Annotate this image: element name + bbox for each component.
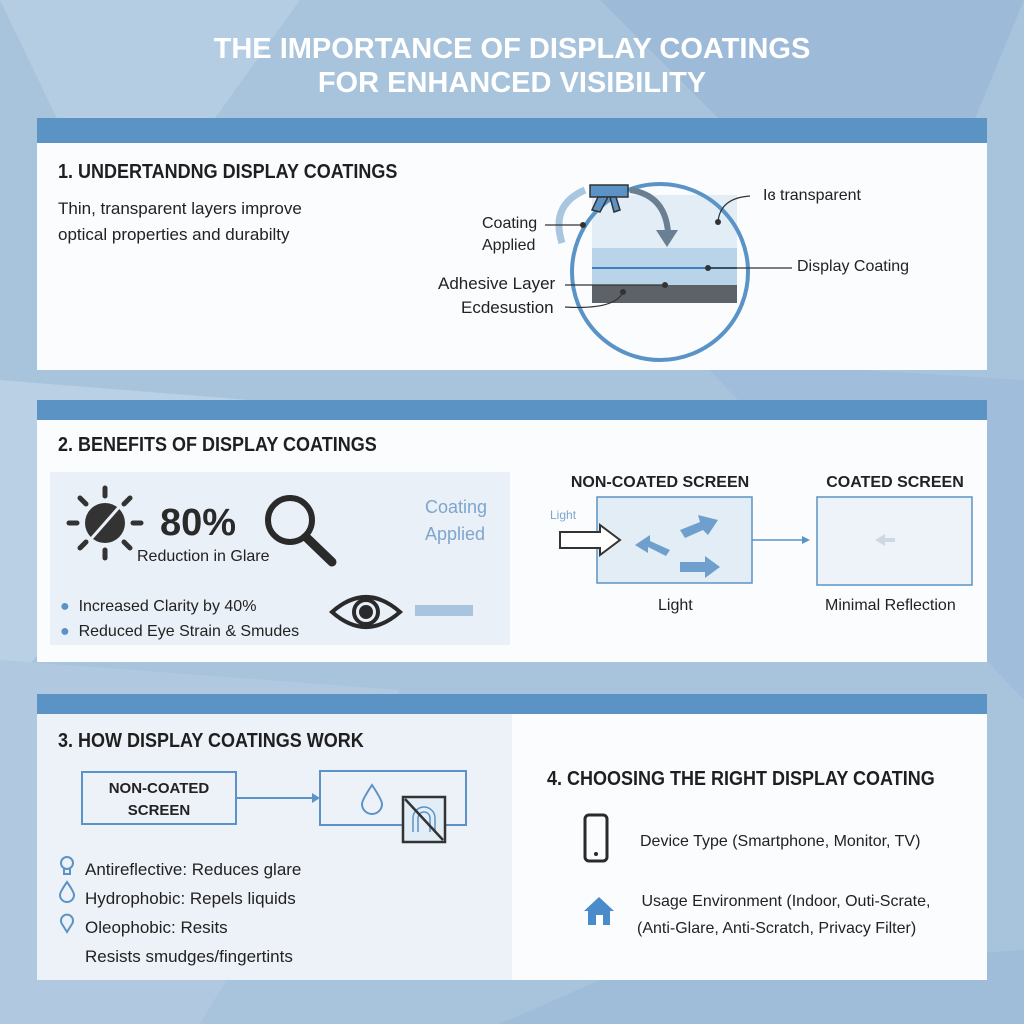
icon: magnifier <box>265 495 336 566</box>
bullets <box>60 598 299 640</box>
icon: sun <box>66 486 144 560</box>
usage environment: (Anti-Glare, Anti-Scratch, Privacy Filter) <box>637 920 916 937</box>
text 1: optical properties and durabilty <box>58 225 290 244</box>
screen comparison: NON-COATED SCREEN <box>571 474 749 491</box>
icon: eye <box>329 594 403 630</box>
icon: phone <box>584 814 608 862</box>
text 1 <box>58 199 302 244</box>
title: FOR ENHANCED VISIBILITY <box>318 67 706 99</box>
heading 4: 4. CHOOSING THE RIGHT DISPLAY COATING <box>547 768 935 790</box>
title: THE IMPORTANCE OF DISPLAY COATINGS <box>214 33 810 65</box>
stat 80%: 80% <box>160 502 236 544</box>
text 1: Thin, transparent layers improve <box>58 199 302 218</box>
screen comparison: Light <box>658 597 693 614</box>
screen comparison: COATED SCREEN <box>826 474 964 491</box>
panel 2: benefits <box>37 400 987 662</box>
bullets: ● Increased Clarity by 40% <box>60 598 256 615</box>
text: Adhesive Layer <box>438 274 555 293</box>
flow diagram: SCREEN <box>128 802 190 819</box>
list of coating types <box>59 856 301 966</box>
text: Display Coating <box>797 258 909 275</box>
flow diagram <box>81 770 467 844</box>
diagram: coating layers <box>545 182 792 362</box>
list of coating types: Antireflective: Reduces glare <box>85 860 301 879</box>
labels 1 <box>482 215 537 254</box>
usage environment: Usage Environment (Indoor, Outi-Scrate, <box>641 893 930 910</box>
screen comparison <box>550 474 973 614</box>
heading 1: 1. UNDERTANDNG DISPLAY COATINGS <box>58 161 397 183</box>
labels 1: Applied <box>482 237 535 254</box>
panel 1: understanding <box>37 118 987 370</box>
heading 2: 2. BENEFITS OF DISPLAY COATINGS <box>58 434 377 456</box>
usage environment <box>637 893 930 937</box>
panel 3: how they work & choosing <box>37 694 987 980</box>
list of coating types: Resists smudges/fingertints <box>85 947 293 966</box>
labels 1: Coating <box>482 215 537 232</box>
coating applied label: Coating <box>425 497 487 517</box>
coating applied label <box>425 497 487 544</box>
device type: Device Type (Smartphone, Monitor, TV) <box>640 833 920 850</box>
text: Iɞ transparent <box>763 187 861 204</box>
list of coating types: Hydrophobic: Repels liquids <box>85 889 296 908</box>
title <box>214 33 810 99</box>
heading 3: 3. HOW DISPLAY COATINGS WORK <box>58 730 364 752</box>
coating applied label: Applied <box>425 524 485 544</box>
icon: house <box>584 897 614 925</box>
screen comparison: Minimal Reflection <box>825 597 956 614</box>
text: Ecdesustion <box>461 298 554 317</box>
bullets: ● Reduced Eye Strain & Smudes <box>60 623 299 640</box>
benefit box: Reduction in Glare <box>137 548 270 565</box>
list of coating types: Oleophobic: Resits <box>85 918 228 937</box>
benefit box <box>50 472 510 645</box>
screen comparison: Light <box>550 508 576 522</box>
flow diagram: NON-COATED <box>109 780 209 797</box>
